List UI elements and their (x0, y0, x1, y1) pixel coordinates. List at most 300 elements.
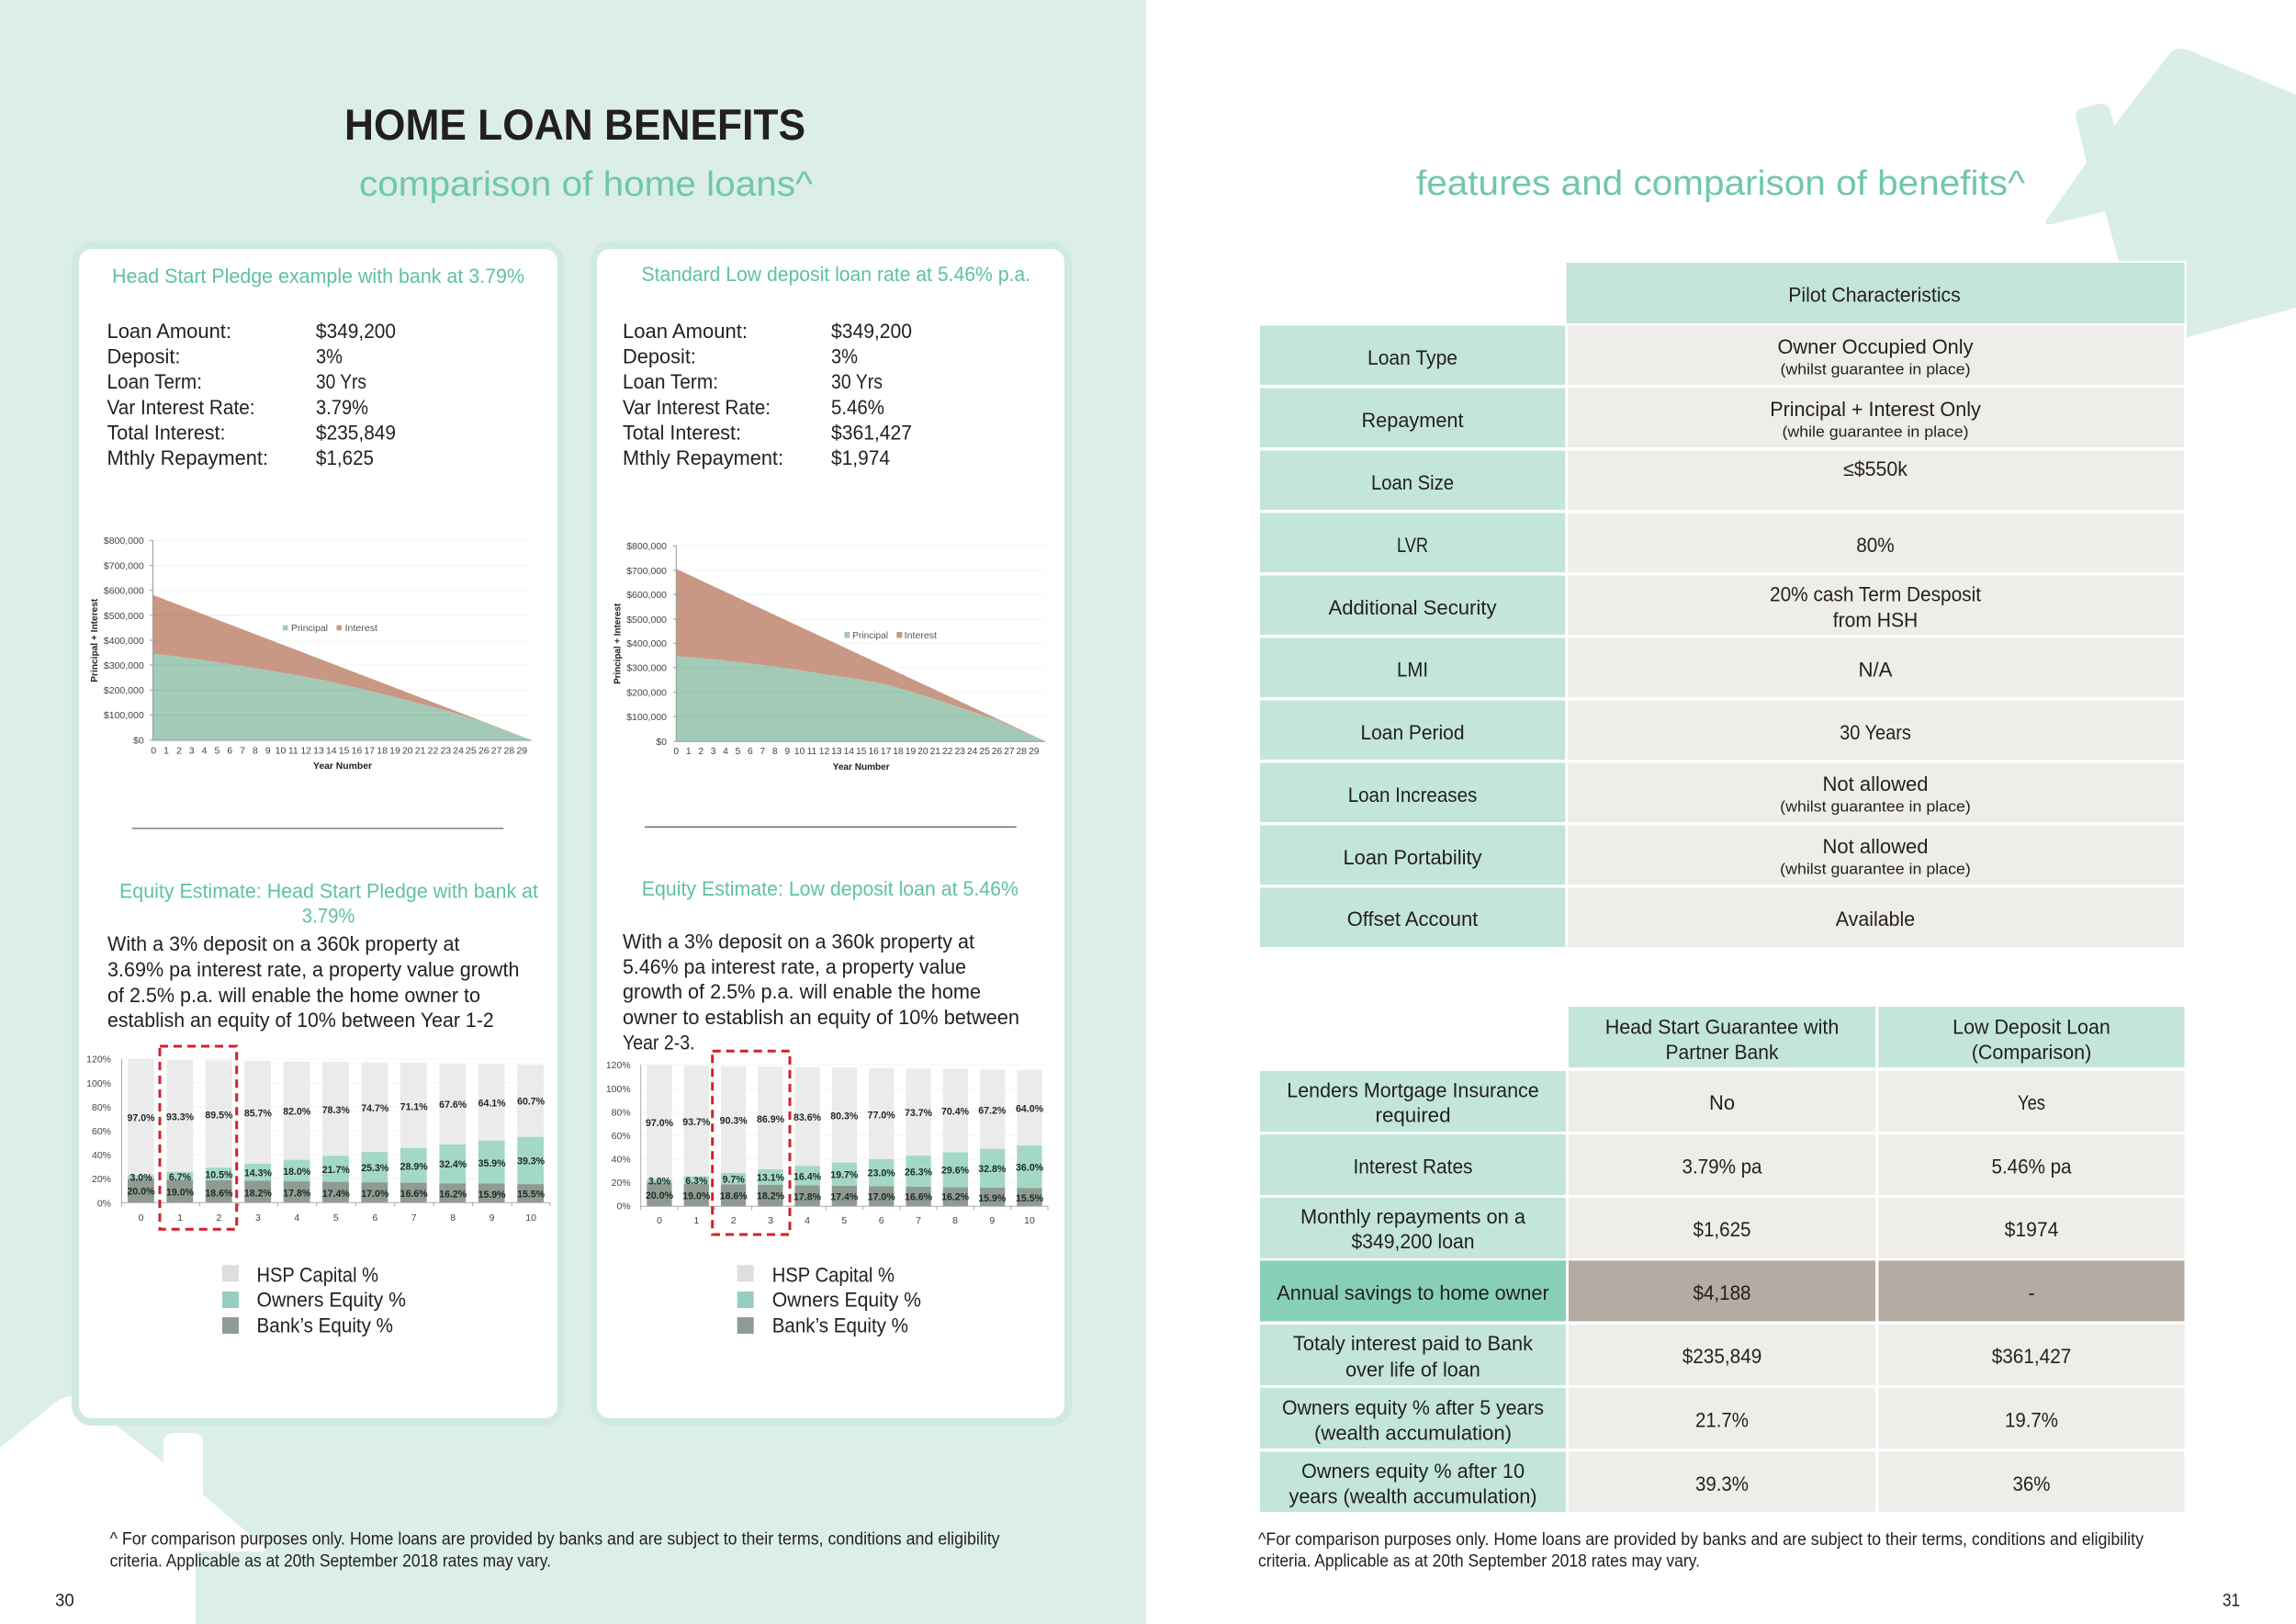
row: Loan Type: Owner Occupied Only (1778, 335, 1973, 358)
left page background (0, 0, 1146, 1624)
row: Owners equity after 10 years: 36% (2013, 1472, 2050, 1495)
stacked bar chart: equity, low deposit: 7 (916, 1215, 921, 1226)
area chart: principal and interest, low deposit: $400,000 (626, 638, 667, 649)
stacked bar chart: equity, Head Start: 15.9% (478, 1190, 506, 1201)
row: Loan Increases: (whilst guarantee in place) (1780, 797, 1971, 815)
area chart: principal and interest, Head Start: 20 (402, 746, 413, 757)
area chart: principal and interest, low deposit: 18 (893, 747, 904, 757)
row: LVR: LVR (1397, 534, 1428, 557)
section heading: equity estimate: Equity Estimate: Low deposit loan at 5.46% (642, 877, 1019, 900)
row: Loan Increases (1260, 762, 2184, 822)
row: Monthly repayments (1260, 1198, 2184, 1258)
area chart: principal and interest, Head Start: $600,000 (104, 586, 144, 597)
stacked bar chart: equity, Head Start: 20% (92, 1174, 111, 1185)
bars: HSP capital (128, 1059, 544, 1175)
area chart: principal and interest, Head Start: 22 (428, 746, 438, 757)
stacked bar chart: equity, low deposit: 93.7% (682, 1117, 711, 1128)
area chart: principal and interest, Head Start: 24 (453, 746, 464, 757)
row: Loan Type: (whilst guarantee in place) (1780, 360, 1971, 378)
loan details list (623, 320, 912, 469)
area chart: principal and interest, Head Start: 11 (288, 746, 298, 757)
row: Loan Size: ≤$550k (1843, 457, 1908, 480)
area chart: principal and interest, Head Start: 0 (151, 746, 156, 757)
stacked bar chart: equity, Head Start: 60.7% (517, 1097, 546, 1108)
area chart: principal and interest, low deposit: $100,000 (626, 712, 667, 723)
section heading: equity estimate: 3.79% (302, 905, 355, 928)
stacked bar chart: equity, low deposit: 16.6% (905, 1192, 933, 1203)
stacked bar chart: equity, low deposit: 23.0% (868, 1168, 895, 1179)
loan details list: 30 Yrs (316, 370, 366, 393)
row: Owners equity after 10 years: Owners equity % after 10 (1301, 1460, 1525, 1483)
row: Monthly repayments: $1974 (2005, 1218, 2058, 1241)
area chart: principal and interest, low deposit: 25 (979, 747, 990, 757)
chart legend: Bank’s Equity % (772, 1314, 908, 1337)
row: Offset Account (1260, 887, 2184, 947)
bars: bank equity (128, 1179, 544, 1202)
area chart: principal and interest, low deposit: 12 (819, 747, 829, 757)
area chart: principal and interest, low deposit: 3 (711, 747, 716, 757)
area chart: principal and interest, low deposit: 28 (1017, 747, 1027, 757)
row: Total interest paid: $361,427 (1992, 1345, 2071, 1368)
area chart: principal and interest, low deposit: $300,000 (626, 663, 667, 674)
title: HOME LOAN BENEFITS (344, 100, 805, 149)
loan details list: Mthly Repayment: (107, 446, 268, 469)
area chart: principal and interest, Head Start: 7 (240, 746, 245, 757)
table header: Partner Bank (1666, 1041, 1779, 1064)
row: Loan Period (1260, 700, 2184, 760)
area chart: principal and interest, Head Start (89, 536, 532, 772)
area chart: principal and interest, Head Start: 15 (339, 746, 350, 757)
stacked bar chart: equity, low deposit: 70.4% (941, 1107, 970, 1118)
stacked bar chart: equity, Head Start: 21.7% (322, 1165, 350, 1176)
stacked bar chart: equity, low deposit: 20.0% (646, 1190, 674, 1201)
stacked bar chart: equity, Head Start: 35.9% (478, 1158, 506, 1169)
loan details list: $1,625 (316, 446, 374, 469)
section heading: equity estimate: Equity Estimate: Head Start Pledge with bank at (119, 879, 538, 902)
area chart: principal and interest, Head Start: 8 (253, 746, 258, 757)
row: Monthly repayments: $349,200 loan (1352, 1230, 1475, 1253)
row: Annual savings (highlighted): $4,188 (1694, 1281, 1750, 1304)
stacked bar chart: equity, low deposit: 100% (606, 1084, 631, 1095)
loan details list: Var Interest Rate: (107, 396, 255, 419)
stacked bar chart: equity, low deposit: 16.2% (941, 1192, 970, 1203)
stacked bar chart: equity, Head Start: 82.0% (283, 1106, 311, 1117)
equity paragraph (623, 930, 1019, 1054)
row: Annual savings (highlighted): Annual savings to home owner (1277, 1281, 1549, 1304)
row: Total interest paid (1260, 1325, 2184, 1385)
row: LVR: 80% (1856, 534, 1895, 557)
stacked bar chart: equity, low deposit (606, 1051, 1048, 1235)
stacked bar chart: equity, Head Start: 89.5% (205, 1111, 233, 1122)
loan details list: Mthly Repayment: (623, 446, 783, 469)
area chart: principal and interest, Head Start: $0 (133, 735, 144, 746)
area chart: principal and interest, Head Start: $400,000 (104, 636, 144, 647)
chart legend (222, 1263, 406, 1337)
loan details list: $361,427 (831, 421, 912, 445)
table header: Low Deposit Loan (1953, 1016, 2110, 1038)
row: Lenders Mortgage Insurance (1260, 1071, 2184, 1132)
stacked bar chart: equity, low deposit: 73.7% (905, 1108, 933, 1119)
row: Monthly repayments: $1,625 (1694, 1218, 1750, 1241)
row: Loan Portability: Loan Portability (1343, 846, 1482, 869)
stacked bar chart: equity, Head Start: 10 (525, 1212, 536, 1224)
stacked bar chart: equity, Head Start: 17.0% (361, 1189, 389, 1200)
loan details list: 3.79% (316, 396, 368, 419)
stacked bar chart: equity, Head Start: 17.8% (283, 1188, 311, 1199)
loan details list: $349,200 (316, 320, 396, 343)
stacked bar chart: equity, Head Start: 28.9% (400, 1161, 428, 1172)
stacked bar chart: equity, low deposit: 0% (617, 1201, 631, 1212)
loan details list: $1,974 (831, 446, 890, 469)
row: Owners equity after 10 years: 39.3% (1695, 1472, 1749, 1495)
stacked bar chart: equity, low deposit: 18.6% (720, 1191, 748, 1202)
area chart: principal and interest, Head Start: 6 (227, 746, 232, 757)
row: Loan Type: Loan Type (1367, 346, 1458, 369)
area chart: principal and interest, Head Start: 19 (389, 746, 400, 757)
equity paragraph: owner to establish an equity of 10% between (623, 1006, 1019, 1029)
area chart: principal and interest, low deposit: 6 (748, 747, 753, 757)
panel: Head Start Pledge card (72, 241, 564, 1426)
stacked bar chart: equity, low deposit: 64.0% (1016, 1104, 1044, 1115)
stacked bar chart: equity, Head Start: 9 (490, 1212, 495, 1224)
row: Loan Size: Loan Size (1371, 471, 1454, 494)
area chart: principal and interest, low deposit: $200,000 (626, 687, 667, 698)
row: Owners equity after 5 years: 19.7% (2005, 1409, 2058, 1431)
stacked bar chart: equity, Head Start: 14.3% (244, 1168, 272, 1179)
chart legend (737, 1263, 921, 1337)
row: Total interest paid: Totaly interest paid to Bank (1293, 1332, 1534, 1355)
row: Additional Security (1260, 575, 2184, 635)
stacked bar chart: equity, Head Start: 16.2% (439, 1189, 467, 1200)
loan details list: Loan Term: (107, 370, 202, 393)
stacked bar chart: equity, low deposit: 6.3% (685, 1176, 708, 1187)
area chart: principal and interest, Head Start: 18 (377, 746, 388, 757)
row: LMI: N/A (1859, 658, 1893, 682)
stacked bar chart: equity, Head Start: 93.3% (166, 1112, 195, 1123)
row: Offset Account: Available (1836, 908, 1915, 930)
area chart: principal and interest, low deposit: $600,000 (626, 590, 667, 601)
area chart: principal and interest, low deposit: 19 (906, 747, 916, 757)
area chart: principal and interest, Head Start: 13 (313, 746, 324, 757)
table: loan comparison (1260, 1007, 2184, 1512)
chart legend: Owners Equity % (257, 1289, 406, 1312)
stacked bar chart: equity, Head Start: 16.6% (400, 1189, 428, 1200)
row: Lenders Mortgage Insurance: No (1709, 1091, 1735, 1114)
stacked bar chart: equity, Head Start: 10.5% (205, 1170, 233, 1181)
table header (1569, 1007, 2184, 1067)
stacked bar chart: equity, Head Start: 100% (86, 1078, 111, 1089)
stacked bar chart: equity, Head Start: 2 (216, 1212, 221, 1224)
stacked bar chart: equity, Head Start: 7 (411, 1212, 417, 1224)
area chart: principal and interest, Head Start: $500,000 (104, 611, 144, 622)
stacked bar chart: equity, Head Start: 6.7% (169, 1172, 192, 1183)
stacked bar chart: equity, low deposit: 10 (1024, 1215, 1035, 1226)
stacked bar chart: equity, low deposit: 77.0% (868, 1110, 895, 1121)
area chart: principal and interest, Head Start: $700,000 (104, 560, 144, 571)
callout: dashed highlight year 1-2 (160, 1046, 237, 1229)
row: Loan Period: Loan Period (1361, 721, 1464, 744)
equity paragraph (107, 932, 520, 1032)
row: Owners equity after 5 years: 21.7% (1695, 1409, 1749, 1431)
area chart: principal and interest, low deposit: 21 (930, 747, 940, 757)
row: Loan Portability: Not allowed (1822, 835, 1929, 858)
row: LVR (1260, 513, 2184, 572)
stacked bar chart: equity, Head Start: 18.6% (205, 1188, 233, 1199)
card heading: Standard Low deposit loan rate at 5.46% p.a. (641, 263, 1030, 286)
loan details list: $349,200 (831, 320, 912, 343)
stacked bar chart: equity, Head Start: 25.3% (361, 1163, 389, 1174)
stacked bar chart: equity, low deposit: 80.3% (830, 1111, 859, 1122)
stacked bar chart: equity, low deposit: 0 (657, 1215, 662, 1226)
row: Lenders Mortgage Insurance: Lenders Mortgage Insurance (1287, 1078, 1539, 1102)
area chart: principal and interest, low deposit: 22 (942, 747, 953, 757)
stacked bar chart: equity, low deposit: 40% (612, 1155, 631, 1166)
stacked bar chart: equity, low deposit: 3 (768, 1215, 773, 1226)
stacked bar chart: equity, Head Start: 19.0% (166, 1187, 195, 1198)
loan details list: 5.46% (831, 396, 884, 419)
bars: HSP capital (647, 1065, 1042, 1179)
row: Lenders Mortgage Insurance: required (1376, 1104, 1451, 1127)
stacked bar chart: equity, low deposit: 15.9% (978, 1193, 1007, 1204)
area chart: principal and interest, low deposit: 13 (831, 747, 842, 757)
stacked bar chart: equity, Head Start: 3.0% (129, 1173, 152, 1184)
area chart: principal and interest, low deposit: $800,000 (626, 541, 667, 552)
area chart: principal and interest, low deposit (613, 541, 1045, 773)
stacked bar chart: equity, low deposit: 32.8% (978, 1164, 1007, 1175)
row: Total interest paid: $235,849 (1683, 1345, 1761, 1368)
loan details list: Deposit: (107, 345, 180, 367)
row: Lenders Mortgage Insurance: Yes (2018, 1091, 2045, 1114)
stacked bar chart: equity, low deposit: 17.0% (868, 1192, 895, 1203)
stacked bar chart: equity, low deposit: 80% (612, 1108, 631, 1119)
loan details list: 3% (316, 345, 343, 367)
chart legend: HSP Capital % (257, 1263, 378, 1286)
stacked bar chart: equity, low deposit: 19.0% (682, 1191, 711, 1202)
row: LMI (1260, 637, 2184, 697)
area chart: principal and interest, low deposit: 27 (1004, 747, 1015, 757)
area chart: principal and interest, low deposit: 24 (967, 747, 978, 757)
icon: white house silhouette, left page (0, 1396, 264, 1624)
stacked bar chart: equity, Head Start: 85.7% (244, 1108, 272, 1119)
row: Owners equity after 10 years: years (wealth accumulation) (1289, 1484, 1537, 1508)
area chart: principal and interest, Head Start: 3 (189, 746, 195, 757)
row: Owners equity after 5 years: Owners equity % after 5 years (1282, 1396, 1544, 1419)
stacked bar chart: equity, low deposit: 16.4% (793, 1171, 822, 1182)
area chart: principal and interest, low deposit: 10 (794, 747, 805, 757)
stacked bar chart: equity, low deposit: 9.7% (723, 1175, 745, 1186)
stacked bar chart: equity, low deposit: 67.2% (978, 1105, 1007, 1116)
row: Loan Increases: Not allowed (1822, 773, 1929, 795)
row: Loan Portability: (whilst guarantee in place) (1780, 860, 1971, 877)
stacked bar chart: equity, Head Start: 40% (92, 1150, 111, 1161)
table: pilot characteristics (1260, 261, 2187, 950)
row: Offset Account: Offset Account (1347, 908, 1478, 930)
stacked bar chart: equity, low deposit: 1 (693, 1215, 699, 1226)
row: Owners equity after 5 years (1260, 1388, 2184, 1449)
footnote: left page: criteria. Applicable as at 20th September 2018 rates may vary. (110, 1552, 551, 1572)
stacked bar chart: equity, low deposit: 17.8% (793, 1192, 822, 1203)
equity paragraph: 5.46% pa interest rate, a property value (623, 955, 966, 978)
stacked bar chart: equity, low deposit: 86.9% (757, 1114, 785, 1125)
stacked bar chart: equity, low deposit: 2 (731, 1215, 737, 1226)
stacked bar chart: equity, low deposit: 120% (606, 1060, 631, 1071)
loan details list: Deposit: (623, 345, 696, 367)
footnote: right page: ^For comparison purposes only. Home loans are provided by banks and are subject to their terms, conditions and eligibility (1258, 1530, 2144, 1550)
loan details list: Loan Term: (623, 370, 718, 393)
row: Interest Rates: 5.46% pa (1991, 1156, 2072, 1179)
loan details list: Loan Amount: (107, 320, 231, 343)
area chart: principal and interest, low deposit: Year Number (833, 761, 890, 773)
table header: Pilot Characteristics (1788, 283, 1961, 306)
stacked bar chart: equity, low deposit: 97.0% (646, 1118, 674, 1129)
stacked bar chart: equity, Head Start: 1 (177, 1212, 183, 1224)
stacked bar chart: equity, Head Start: 64.1% (478, 1098, 506, 1109)
area chart: principal and interest, Head Start: 4 (202, 746, 208, 757)
stacked bar chart: equity, low deposit: 4 (805, 1215, 810, 1226)
area chart: principal and interest, Head Start: 17 (364, 746, 375, 757)
loan details list (107, 320, 396, 469)
area chart: principal and interest, low deposit: 23 (954, 747, 965, 757)
stacked bar chart: equity, Head Start: 32.4% (439, 1159, 467, 1170)
stacked bar chart: equity, low deposit: 19.7% (830, 1169, 859, 1180)
area chart: principal and interest, Head Start: 12 (300, 746, 311, 757)
bars: bank equity (647, 1183, 1042, 1206)
area chart: principal and interest, low deposit: 4 (723, 747, 728, 757)
stacked bar chart: equity, low deposit: 8 (952, 1215, 958, 1226)
area chart: principal and interest, low deposit: 8 (772, 747, 778, 757)
bars: owners equity (128, 1137, 544, 1184)
row: Total interest paid: over life of loan (1345, 1358, 1480, 1381)
row: Interest Rates (1260, 1134, 2184, 1195)
stacked bar chart: equity, low deposit: 13.1% (757, 1172, 785, 1183)
stacked bar chart: equity, low deposit: 26.3% (905, 1167, 933, 1179)
stacked bar chart: equity, Head Start: 74.7% (361, 1103, 389, 1114)
area chart: principal and interest, low deposit: 14 (844, 747, 854, 757)
stacked bar chart: equity, low deposit: 9 (989, 1215, 995, 1226)
stacked bar chart: equity, low deposit: 3.0% (648, 1177, 671, 1188)
row: Additional Security: Additional Security (1328, 596, 1497, 619)
stacked bar chart: equity, Head Start: 67.6% (439, 1100, 467, 1111)
area chart: principal and interest, low deposit: 7 (760, 747, 765, 757)
table header: (Comparison) (1972, 1041, 2091, 1064)
loan details list: Total Interest: (623, 421, 741, 445)
area chart: principal and interest, low deposit: 17 (881, 747, 892, 757)
section heading: equity estimate (119, 879, 538, 928)
area chart: principal and interest, low deposit: 20 (917, 747, 929, 757)
area chart: principal and interest, low deposit: 15 (856, 747, 867, 757)
area chart: principal and interest, low deposit: 11 (807, 747, 817, 757)
area chart: principal and interest, Head Start: 23 (440, 746, 451, 757)
page number 31: 31 (2223, 1591, 2240, 1611)
row: Loan Portability (1260, 825, 2184, 885)
area chart: principal and interest, Head Start: 28 (504, 746, 514, 757)
area chart: principal and interest, Head Start: 10 (276, 746, 286, 757)
area chart: principal and interest, Head Start: $800,000 (104, 536, 144, 547)
page number 30: 30 (55, 1592, 74, 1611)
subtitle: features and comparison of benefits: features and comparison of benefits^ (1416, 164, 2025, 203)
callout: dashed highlight year 2-3 (713, 1051, 790, 1235)
area chart: principal and interest, Head Start: 21 (415, 746, 426, 757)
stacked bar chart: equity, low deposit: 15.5% (1016, 1193, 1044, 1204)
area chart: principal and interest, low deposit: $0 (656, 737, 667, 748)
stacked bar chart: equity, low deposit: 20% (612, 1178, 631, 1189)
area chart: principal and interest, Head Start: 27 (491, 746, 502, 757)
area chart: principal and interest, Head Start: $100,000 (104, 710, 144, 721)
row: Annual savings (highlighted) (1260, 1260, 2184, 1321)
area chart: principal and interest, Head Start: Principal + Interest (89, 598, 100, 682)
stacked bar chart: equity, low deposit: 36.0% (1016, 1163, 1044, 1174)
loan details list: Total Interest: (107, 421, 226, 445)
area chart: principal and interest, Head Start: 26 (478, 746, 490, 757)
stacked bar chart: equity, Head Start: 18.2% (244, 1188, 272, 1199)
area chart: principal and interest, Head Start: 5 (214, 746, 219, 757)
stacked bar chart: equity, Head Start: 6 (372, 1212, 377, 1224)
area chart: principal and interest, Head Start: 14 (326, 746, 337, 757)
icon: mint house silhouette, right page (2045, 49, 2296, 337)
area chart: principal and interest, low deposit: Interest (905, 630, 937, 641)
area chart: principal and interest, Head Start: 16 (352, 746, 362, 757)
loan details list: Loan Amount: (623, 320, 748, 343)
stacked bar chart: equity, low deposit: 29.6% (941, 1165, 970, 1176)
stacked bar chart: equity, Head Start: 120% (86, 1054, 111, 1066)
stacked bar chart: equity, Head Start: 5 (333, 1212, 339, 1224)
row: Loan Size (1260, 450, 2184, 510)
area chart: principal and interest, Head Start: 9 (265, 746, 271, 757)
row: Interest Rates: Interest Rates (1354, 1156, 1473, 1179)
stacked bar chart: equity, Head Start (86, 1046, 550, 1229)
loan details list: 3% (831, 345, 858, 367)
row: Additional Security: 20% cash Term Desposit (1770, 583, 1981, 606)
row: Repayment: Repayment (1361, 409, 1464, 432)
stacked bar chart: equity, low deposit: 17.4% (830, 1192, 859, 1203)
table header (1567, 263, 2185, 323)
stacked bar chart: equity, low deposit: 83.6% (793, 1112, 822, 1123)
table header: Head Start Guarantee with (1605, 1016, 1839, 1038)
loan details list: 30 Yrs (831, 370, 883, 393)
area chart: principal and interest, Head Start: $300,000 (104, 660, 144, 671)
stacked bar chart: equity, low deposit: 5 (841, 1215, 847, 1226)
area chart: principal and interest, low deposit: 16 (868, 747, 879, 757)
area chart: principal and interest, Head Start: 25 (466, 746, 477, 757)
loan details list: $235,849 (316, 421, 396, 445)
chart legend: Bank’s Equity % (257, 1314, 393, 1337)
row: Repayment (1260, 388, 2184, 447)
stacked bar chart: equity, Head Start: 18.0% (283, 1167, 311, 1178)
stacked bar chart: equity, low deposit: 90.3% (720, 1115, 748, 1126)
row: Annual savings (highlighted): - (2028, 1281, 2035, 1304)
stacked bar chart: equity, low deposit: 60% (612, 1131, 631, 1142)
equity paragraph: With a 3% deposit on a 360k property at (623, 930, 974, 953)
stacked bar chart: equity, Head Start: 80% (92, 1102, 111, 1113)
equity paragraph: of 2.5% p.a. will enable the home owner to (107, 984, 480, 1007)
stacked bar chart: equity, Head Start: 20.0% (127, 1187, 155, 1198)
area chart: principal and interest, low deposit: 1 (686, 747, 692, 757)
area chart: principal and interest, Head Start: 29 (516, 746, 527, 757)
footnote: right page: criteria. Applicable as at 20th September 2018 rates may vary. (1258, 1552, 1700, 1572)
area chart: principal and interest, Head Start: Year Number (313, 761, 372, 772)
stacked bar chart: equity, Head Start: 8 (450, 1212, 456, 1224)
area chart: principal and interest, Head Start: 2 (176, 746, 182, 757)
bars: owners equity (647, 1145, 1042, 1188)
chart legend: Owners Equity % (772, 1289, 921, 1312)
row: Loan Period: 30 Years (1840, 721, 1911, 744)
stacked bar chart: equity, Head Start: 0 (139, 1212, 144, 1224)
area chart: principal and interest, Head Start: 1 (163, 746, 169, 757)
stacked bar chart: equity, low deposit: 18.2% (757, 1191, 785, 1202)
equity paragraph: 3.69% pa interest rate, a property value growth (107, 958, 520, 981)
area chart: principal and interest, low deposit: 5 (736, 747, 741, 757)
equity paragraph: growth of 2.5% p.a. will enable the home (623, 980, 981, 1003)
